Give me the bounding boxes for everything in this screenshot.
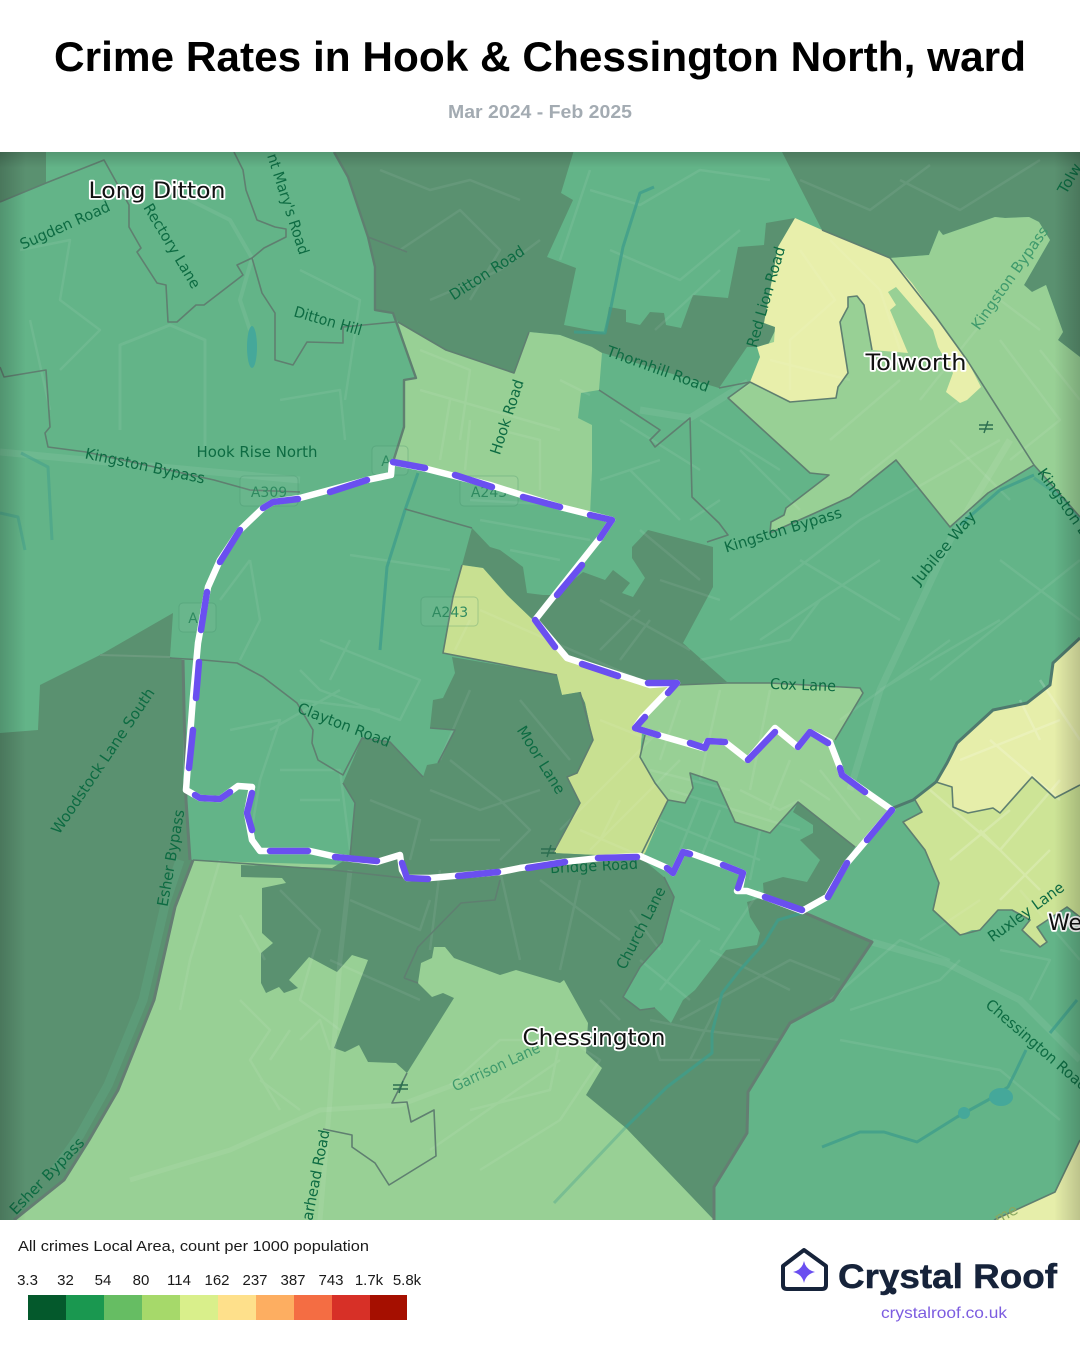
road labels: me — [991, 1200, 1021, 1228]
place labels: Tolworth — [864, 351, 966, 376]
region: north central dark area — [334, 150, 795, 388]
boundary: thick road edges — [14, 638, 1080, 1220]
road labels: Thornhill Road — [603, 342, 712, 396]
road network — [0, 160, 1080, 1220]
legend scale values: 162 — [204, 1272, 230, 1289]
road labels: Kingston Bypass — [722, 504, 844, 556]
shield labels: A243 — [471, 485, 507, 501]
road labels: Church Lane — [613, 884, 669, 972]
legend scale values: 743 — [318, 1272, 344, 1289]
road labels: Clayton Road — [295, 699, 393, 751]
road labels: Woodstock Lane South — [47, 685, 159, 837]
road labels: Kingston Bypass — [83, 445, 207, 488]
region: north-east dark area — [781, 150, 1080, 357]
legend scale values: 54 — [95, 1272, 111, 1289]
region: east pale yellow area — [936, 638, 1080, 813]
region: ward east light area north — [635, 683, 863, 760]
region: ward east light area south — [640, 728, 892, 847]
shield labels: A — [381, 454, 391, 470]
logo: Crystal Roof — [783, 1250, 1058, 1322]
road shields — [179, 446, 518, 632]
region boundary lines — [0, 152, 1080, 1220]
road labels: Red Lion Road — [743, 245, 789, 349]
legend colour ramp — [28, 1295, 407, 1320]
road labels: Bridge Road — [550, 855, 638, 877]
legend scale values: 3.3 — [17, 1272, 38, 1289]
legend title: All crimes Local Area, count per 1000 population — [18, 1238, 369, 1255]
wordmark: Crystal Roof — [838, 1258, 1058, 1296]
region: Tolworth pale yellow area — [750, 218, 981, 403]
shield labels: A309 — [251, 485, 287, 501]
road labels: Hook Rise North — [196, 443, 318, 461]
river and water features — [0, 187, 1080, 1203]
legend scale values: 32 — [57, 1272, 74, 1289]
legend scale values: 5.8k — [393, 1272, 422, 1289]
place labels: Long Ditton — [88, 179, 226, 204]
shield labels: A243 — [432, 605, 468, 621]
road labels: Esher Bypass — [6, 1134, 88, 1218]
wordmark y keyhole tail — [890, 1288, 896, 1294]
road labels: Sugden Road — [17, 197, 113, 253]
region: Hook Road light area — [392, 322, 602, 516]
shield labels: A — [188, 611, 198, 627]
road labels: Esher Bypass — [154, 808, 188, 908]
road labels: Hook Road — [486, 377, 528, 457]
region: east yellow-green area — [903, 777, 1080, 947]
road labels: Ditton Road — [446, 242, 528, 304]
region: southern dark area — [241, 657, 872, 1220]
website: crystalroof.co.uk — [881, 1305, 1008, 1322]
region: north-west corner dark area — [0, 152, 46, 202]
road labels: Ruxley Lane — [984, 878, 1068, 946]
road band along Esher Bypass — [55, 860, 180, 1170]
legend scale values: 80 — [133, 1272, 149, 1289]
map edge vignette — [0, 152, 1080, 1220]
region: lower-left light area — [14, 860, 714, 1220]
road labels — [6, 151, 1080, 1228]
title: Crime Rates in Hook & Chessington North, ward — [54, 33, 1026, 80]
road labels: Kingston Bypass — [968, 223, 1052, 333]
road labels: Rectory Lane — [140, 200, 204, 292]
road labels: Jubilee Way — [908, 508, 980, 589]
legend scale values: 1.7k — [355, 1272, 384, 1289]
place labels — [88, 179, 1080, 1051]
place labels: Chessington — [522, 1026, 666, 1051]
road labels: Cox Lane — [770, 675, 836, 695]
road labels: Moor Lane — [513, 723, 569, 797]
road labels: nt Mary's Road — [263, 151, 313, 257]
shield labels — [188, 454, 507, 627]
rail station markers — [393, 421, 993, 1093]
legend scale values: 237 — [242, 1272, 268, 1289]
region: west dark area — [0, 613, 193, 1220]
ward boundary: Hook & Chessington North — [186, 462, 892, 911]
legend scale values — [17, 1272, 422, 1289]
region: Tolworth light area — [728, 217, 1080, 533]
subtitle: date range: Mar 2024 - Feb 2025 — [448, 102, 632, 122]
road labels: arhead Road — [298, 1128, 334, 1222]
region: central yellow-green area — [443, 565, 677, 857]
legend scale values: 387 — [280, 1272, 306, 1289]
choropleth map — [0, 150, 1080, 1228]
road labels: Garrison Lane — [449, 1039, 543, 1095]
legend — [17, 1238, 422, 1320]
region: south-east corner pale area — [994, 1140, 1080, 1220]
legend scale values: 114 — [167, 1272, 191, 1289]
region: central dark strip — [462, 528, 727, 685]
icon: house with star — [783, 1250, 826, 1289]
road labels: Ditton Hill — [292, 303, 364, 339]
